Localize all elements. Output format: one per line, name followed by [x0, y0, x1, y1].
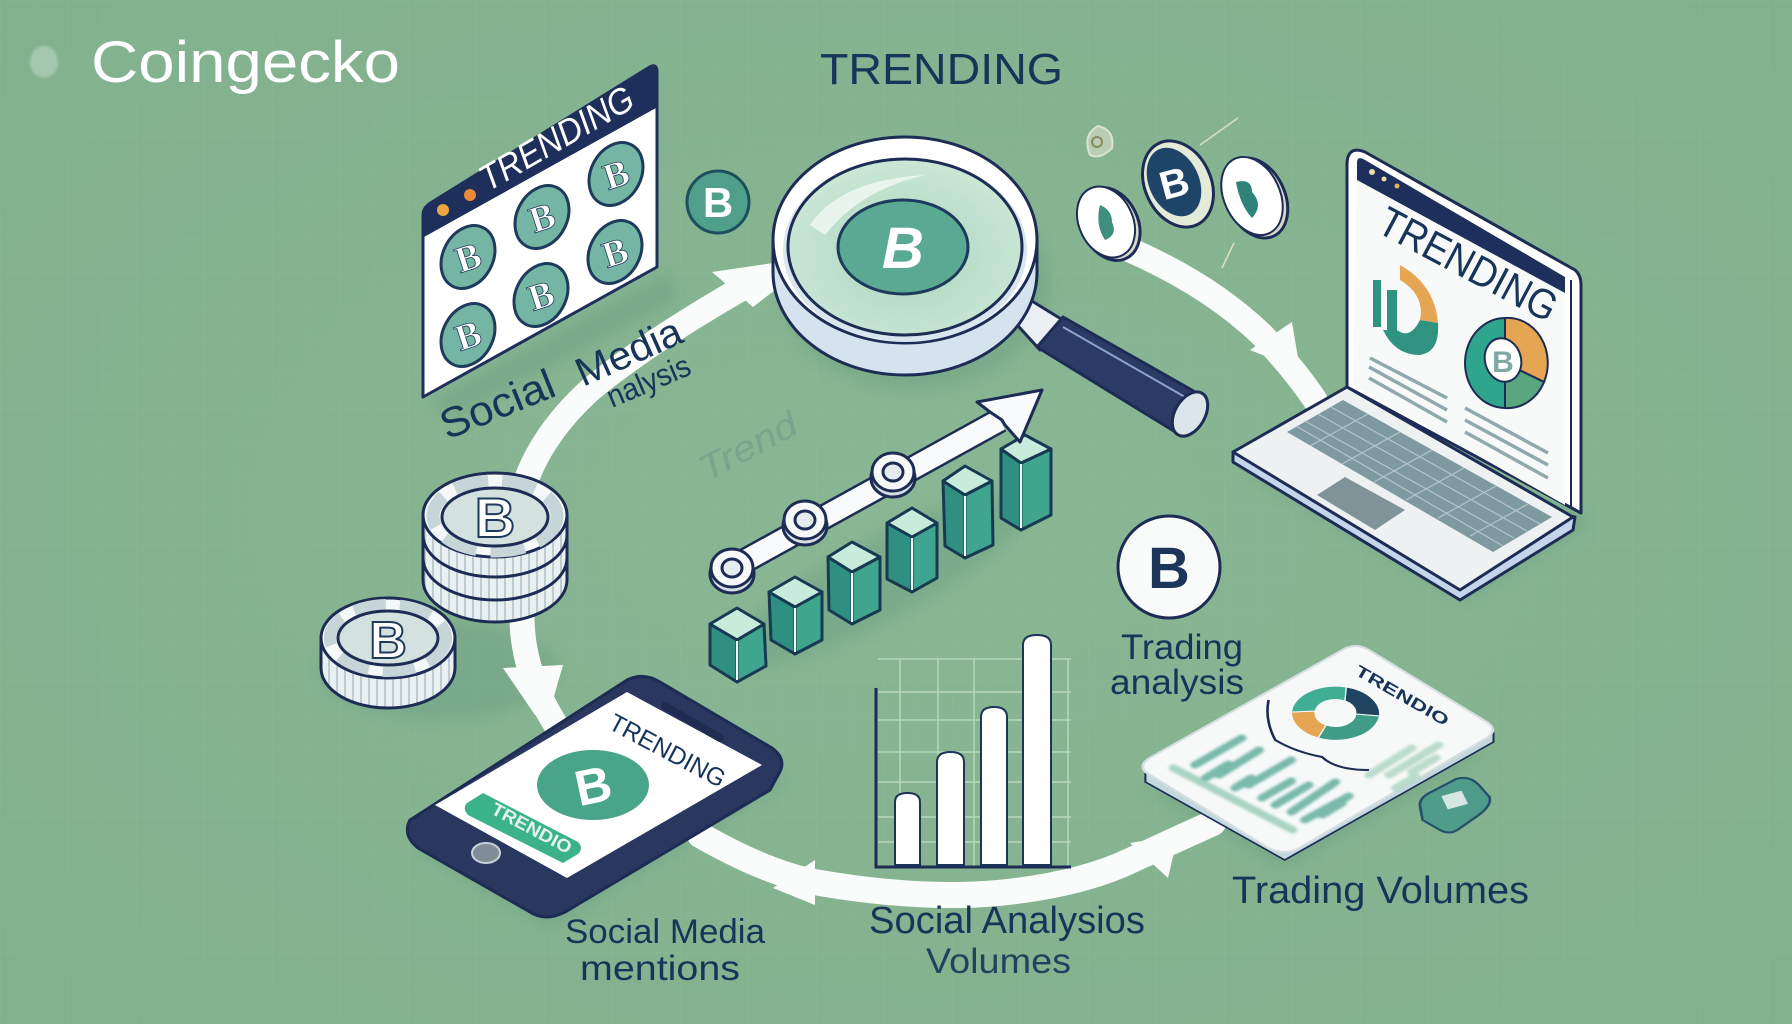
base	[1233, 387, 1575, 600]
icon: home button	[472, 843, 500, 863]
bar 2	[769, 577, 822, 654]
icon: lone green coin: B	[703, 179, 733, 226]
bar	[895, 793, 920, 865]
bar 3	[828, 542, 880, 624]
panel: laptop	[1233, 150, 1581, 600]
panel: tablet dashboard	[1143, 646, 1494, 860]
panel: browser window with trending coins: B	[597, 230, 634, 277]
coin: navy	[1129, 129, 1227, 239]
icon: coin in lens: B	[882, 216, 924, 281]
label: Social Media analysis: Social	[433, 360, 562, 448]
chart: white bar chart	[876, 635, 1071, 867]
chart: tablet bars	[1173, 738, 1439, 830]
coin: navy: B	[1155, 159, 1194, 209]
coin lower: B	[369, 612, 407, 670]
node 1	[710, 549, 754, 593]
label: Trading analysis: analysis	[1110, 663, 1244, 702]
chart: donut	[1291, 686, 1380, 740]
coin lower	[321, 598, 455, 708]
bar 1	[710, 608, 766, 682]
text: browser TRENDING: TRENDING	[472, 77, 641, 199]
icon: magnifying glass	[773, 137, 1215, 442]
bar	[937, 752, 964, 865]
label: Social Media analysis	[433, 309, 696, 448]
panel: smartphone	[407, 676, 782, 917]
coin: white left	[1066, 177, 1151, 270]
label: Social Media mentions	[565, 913, 765, 988]
label: Social Analysios Volumes: Social Analysios	[869, 900, 1145, 942]
bar 6	[1001, 435, 1051, 530]
bar	[981, 707, 1007, 865]
panel: browser window with trending coins: B	[450, 235, 487, 282]
label: Trading analysis: Trading	[1121, 628, 1243, 667]
heading: TRENDING: TRENDING	[820, 45, 1063, 94]
handle	[1010, 298, 1215, 442]
icon: floating coins	[1066, 118, 1300, 270]
arrow: trend line with nodes	[710, 390, 1042, 593]
coin: white right	[1209, 147, 1300, 248]
label: Social Analysios Volumes: Volumes	[926, 942, 1071, 981]
panel: browser window with trending coins: B	[524, 195, 561, 242]
arrow: cycle flow ring	[503, 250, 1315, 905]
icon: lone green coin	[687, 171, 749, 233]
label: Social Media mentions: Social Media	[565, 913, 765, 951]
icon: phone coin	[537, 750, 649, 820]
chart: isometric rising bars	[710, 435, 1051, 682]
chart: right pie	[1465, 318, 1548, 408]
text: laptop TRENDING: TRENDING	[1371, 197, 1566, 331]
icon: coin grid	[430, 133, 654, 376]
pill: phone trending badge	[465, 793, 581, 863]
icon: white coin: B	[1148, 536, 1190, 601]
bar 5	[943, 466, 993, 558]
bar 4	[887, 508, 937, 592]
chart: right pie: B	[1492, 346, 1514, 379]
icon: white coin	[1118, 516, 1220, 618]
panel: browser window with trending coins	[423, 66, 657, 397]
icon: phone coin: B	[570, 755, 617, 817]
logo: Coingecko: Coingecko	[91, 30, 400, 95]
text: tablet heading: TRENDIO	[1352, 663, 1451, 730]
label: Social Media mentions: mentions	[580, 949, 740, 988]
label: Trading Volumes: Trading Volumes	[1232, 870, 1529, 912]
screen	[1347, 150, 1581, 513]
icon: coin in lens	[838, 200, 968, 294]
icon: coin stack with lower coin	[321, 473, 567, 708]
coin stack: B	[475, 486, 515, 549]
node 3	[871, 453, 915, 497]
panel: browser window with trending coins: B	[450, 313, 487, 360]
panel: browser window with trending coins: B	[523, 273, 560, 320]
label: Social Media analysis: Media	[569, 309, 690, 395]
node 2	[783, 501, 827, 545]
pill: phone trending badge: TRENDIO	[488, 799, 575, 858]
bar	[1023, 635, 1051, 865]
icon: small device chip	[1420, 778, 1490, 832]
label: Trading analysis	[1110, 628, 1244, 702]
label: Social Media analysis: nalysis	[601, 348, 696, 414]
coin stack	[423, 473, 567, 622]
chart: left pie	[1373, 265, 1438, 355]
panel: browser window with trending coins: B	[598, 152, 635, 199]
text: phone TRENDING: TRENDING	[604, 709, 730, 793]
text lines	[1369, 358, 1548, 478]
label: Social Analysios Volumes	[869, 900, 1145, 981]
label: faint Trend: Trend	[692, 403, 805, 489]
